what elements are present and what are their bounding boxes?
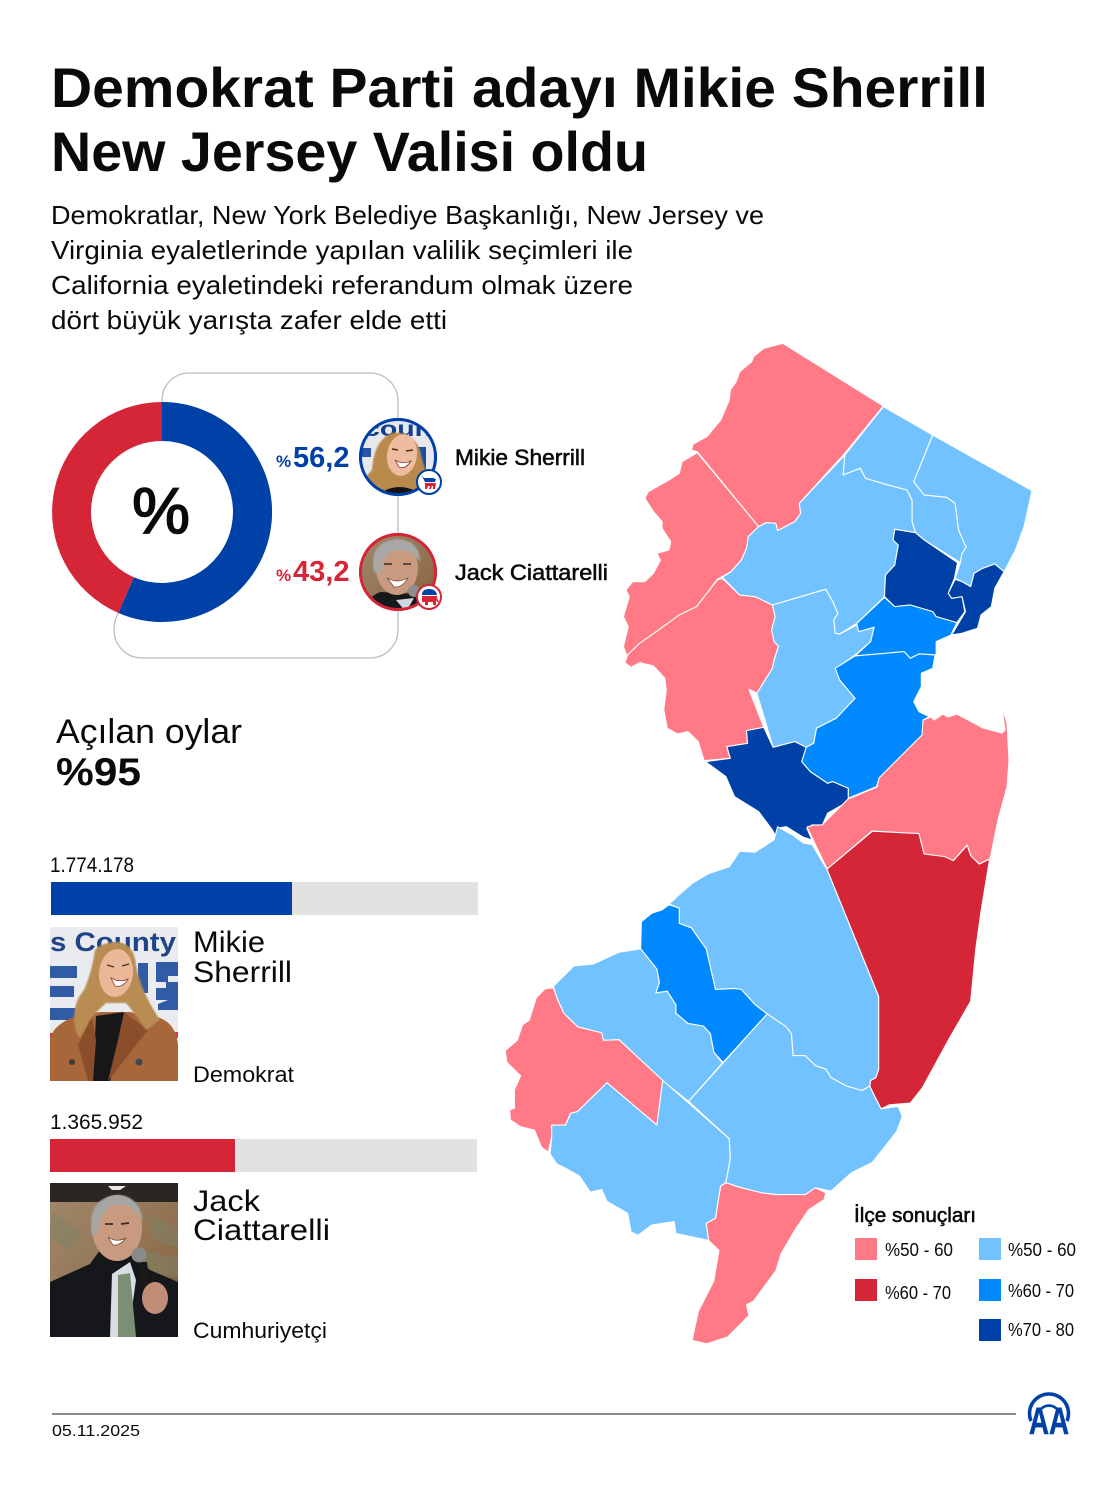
county: Union [855,597,957,658]
county: Mercer [706,727,848,840]
legend item: red 60-70: %60 - 70 [885,1283,951,1303]
legend title: İlçe sonuçları [854,1204,976,1227]
legend item: dark blue 70-80: %70 - 80 [1008,1320,1074,1340]
percentage: 43,2: % [276,566,291,585]
legend item: blue 60-70: %60 - 70 [1008,1281,1074,1301]
legend item: light blue 50-60: %50 - 60 [1008,1240,1076,1260]
party: Demokrat: Demokrat [193,1062,294,1087]
vote bar [50,1139,477,1172]
county: Burlington [669,827,879,1091]
donut chart: vote share [52,402,272,622]
donut center percent sign: % [132,474,190,547]
county: Atlantic [689,1014,902,1195]
county: Sussex [691,343,883,531]
title [51,56,988,183]
legend item: pink 50-60: %50 - 60 [885,1240,953,1260]
legend item: pink 50-60 [855,1238,953,1260]
vote count: 1.365.952 [50,1111,143,1134]
map: New Jersey county results [505,343,1032,1344]
result: Jack Ciattarelli [276,532,608,612]
name: Jack Ciattarelli [193,1185,330,1247]
county: Cumberland [550,1080,730,1240]
county: Monmouth [807,706,1009,869]
county: Salem [505,988,663,1152]
photo: Jack Ciattarelli [50,1183,178,1337]
legend item: blue 60-70 [979,1279,1074,1301]
vote count: 1.774.178 [50,854,134,877]
north counties [623,343,1032,840]
county: Bergen [914,435,1032,587]
name: Jack Ciattarelli: Jack Ciattarelli [455,560,608,585]
legend item: light blue 50-60 [979,1238,1076,1260]
county: Somerset [757,589,874,747]
party: Cumhuriyetçi: Cumhuriyetçi [193,1318,327,1343]
south counties [505,827,990,1344]
logo: Anadolu Agency [1029,1394,1069,1443]
icon: Democratic party donkey badge [417,470,441,494]
photo: Mikie Sherrill: s County [50,927,176,957]
candidate block: Jack Ciattarelli [50,1111,477,1343]
county: Hunterdon [625,578,779,761]
donut segment: Ciattarelli [52,402,162,613]
subtitle text block [51,200,764,335]
subtitle text block: Demokratlar, New York Belediye Başkanlığı, New Jersey ve [51,200,764,230]
portrait: Sherrill circle: coun [364,418,432,441]
legend item: dark blue 70-80 [979,1319,1074,1341]
county: Cape May [692,1183,826,1344]
title: New Jersey Valisi oldu [51,120,648,183]
title: Demokrat Parti adayı Mikie Sherrill [51,56,988,119]
portrait: Ciattarelli circle [358,532,438,612]
subtitle text block: dört büyük yarışta zafer elde etti [51,305,447,335]
opened votes stat [56,713,242,794]
result: Mikie Sherrill [276,417,585,497]
percentage: 56,2: % [276,452,291,471]
name: Mikie Sherrill [193,926,292,989]
legend item: red 60-70 [855,1279,951,1303]
county: Essex [884,529,965,623]
donut segment: Sherrill [118,402,272,622]
name: Jack Ciattarelli: Ciattarelli [193,1214,330,1247]
county: Morris [722,455,915,634]
portrait: Sherrill circle [358,417,438,497]
county: Camden [641,905,767,1062]
icon: Republican party elephant badge [417,585,441,609]
opened votes stat: Açılan oylar [56,713,242,751]
photo: Mikie Sherrill [50,927,178,1081]
candidate block: Mikie Sherrill [50,854,478,1087]
county: Gloucester [553,949,722,1101]
connector outline: results frame [114,373,398,658]
county: Hudson [948,564,1004,635]
footer rule [52,1413,1016,1415]
opened votes stat: %95 [56,751,141,794]
logo: Anadolu Agency: AA [1029,1401,1069,1443]
subtitle text block: Virginia eyaletlerinde yapılan valilik seçimleri ile [51,235,633,265]
county: Passaic [843,407,966,563]
percentage: 43,2: 43,2 [293,556,349,588]
name: Jack Ciattarelli: Jack [193,1185,261,1218]
subtitle text block: California eyaletindeki referandum olmak üzere [51,270,633,300]
date: 05.11.2025 [52,1423,140,1440]
name: Mikie Sherrill: Mikie [193,926,265,959]
name: Mikie Sherrill: Mikie Sherrill [455,445,585,470]
vote bar [51,882,478,915]
county: Middlesex [802,652,935,798]
name: Mikie Sherrill: Sherrill [193,956,292,989]
legend: county results [854,1204,1076,1341]
county: Warren [623,453,759,656]
county: Ocean [827,831,990,1109]
percentage: 56,2: 56,2 [293,442,349,474]
